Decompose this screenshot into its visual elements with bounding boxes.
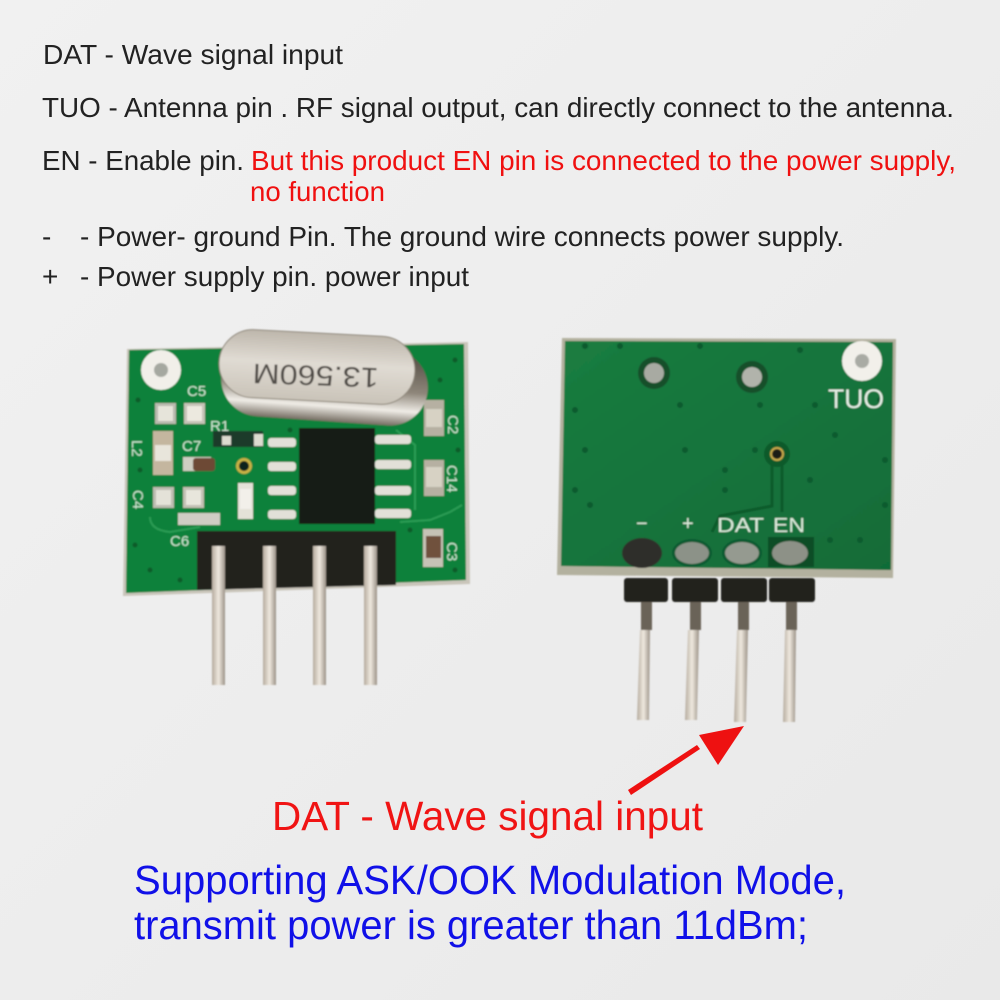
line one: Supporting ASK/OOK Modulation Mode, (134, 857, 846, 903)
silkscreen labels: C14 (443, 465, 460, 493)
minus pin description: - (42, 221, 51, 252)
silkscreen labels: R1 (210, 418, 229, 435)
back pin header (624, 578, 815, 602)
DAT description: DAT - Wave signal input (43, 39, 343, 70)
silkscreen labels (128, 383, 461, 561)
EN description: But this product EN pin is connected to the power supply, (251, 145, 956, 176)
mounting hole pad (141, 350, 181, 390)
front pins (212, 546, 377, 685)
through-hole solder joints (638, 357, 768, 393)
via and trace (712, 441, 790, 532)
ic leads (268, 435, 411, 519)
silkscreen labels: C3 (443, 542, 460, 561)
TUO label: TUO (828, 384, 884, 414)
silkscreen labels: L2 (128, 440, 145, 457)
smd components (153, 400, 444, 567)
TUO description: TUO - Antenna pin . RF signal output, can directly connect to the antenna. (42, 92, 954, 123)
plus pin description: + (42, 261, 58, 292)
minus pin description: - Power- ground Pin. The ground wire connects power supply. (80, 221, 844, 252)
EN description: no function (250, 176, 385, 207)
back pin labels (636, 513, 805, 537)
front module photo (123, 328, 470, 685)
ic chip (299, 428, 375, 524)
back pin labels: EN (773, 515, 805, 537)
front pcb board (123, 342, 470, 596)
pin description text block (42, 39, 956, 292)
line two: transmit power is greater than 11dBm; (134, 902, 808, 948)
silkscreen labels: C2 (444, 415, 461, 434)
back module photo (557, 338, 896, 722)
silkscreen labels: C5 (187, 383, 206, 400)
silkscreen labels: C4 (129, 490, 146, 509)
antenna pad (842, 341, 882, 381)
back pin labels: + (682, 513, 694, 535)
DAT callout: DAT - Wave signal input (272, 793, 704, 839)
back pcb board (557, 338, 896, 578)
EN description: EN - Enable pin. (42, 145, 244, 176)
red arrow (628, 726, 744, 795)
pin solder pads (622, 537, 814, 568)
crystal oscillator: 13.560M (252, 358, 379, 393)
back pins (637, 602, 797, 722)
back pin labels: − (636, 513, 648, 535)
silkscreen labels: C7 (182, 438, 201, 455)
plus pin description: - Power supply pin. power input (80, 261, 469, 292)
silkscreen labels: C6 (170, 533, 189, 550)
blue modulation note (134, 857, 846, 948)
black pin header (197, 531, 396, 590)
crystal oscillator (217, 328, 430, 428)
back pin labels: DAT (717, 515, 764, 537)
EN description (42, 145, 956, 207)
